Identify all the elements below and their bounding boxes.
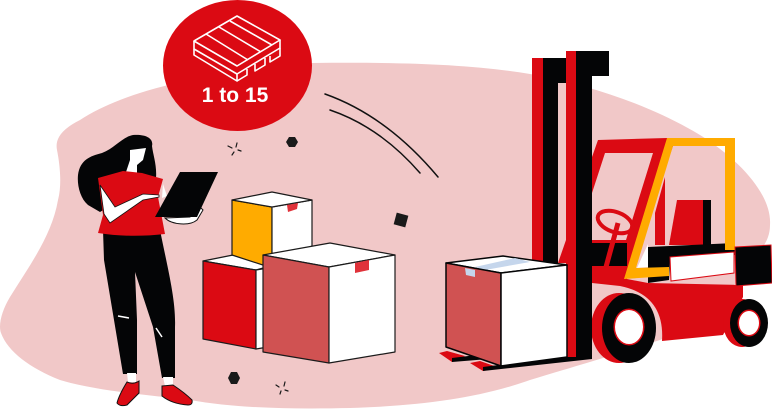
shoes	[117, 381, 192, 406]
seat	[669, 200, 711, 245]
decorative shapes	[228, 137, 408, 394]
body	[592, 266, 743, 341]
arm	[100, 185, 159, 223]
shirt	[98, 171, 165, 236]
hair	[78, 135, 156, 212]
box on forks	[446, 256, 567, 366]
yellow box	[232, 192, 312, 268]
icon: pallet	[194, 16, 280, 81]
floor deck	[592, 243, 627, 267]
red box	[203, 255, 285, 349]
rear wheel	[723, 299, 768, 347]
steering wheel	[595, 206, 635, 267]
other arm	[165, 205, 203, 224]
yellow roll cage	[624, 138, 735, 279]
trousers	[103, 230, 175, 378]
rear mast	[532, 58, 566, 263]
counterweight	[735, 245, 772, 286]
black chassis	[648, 243, 735, 283]
cab frame	[592, 138, 673, 283]
large box	[263, 243, 395, 363]
face and neck	[126, 148, 146, 173]
trouser highlights	[118, 316, 162, 337]
red badge	[163, 0, 312, 131]
white cab panel	[637, 244, 648, 268]
badge label: 1 to 15	[202, 84, 269, 107]
tablet	[155, 172, 218, 217]
person with tablet	[78, 135, 218, 406]
forks	[439, 351, 592, 371]
motion arcs	[325, 94, 438, 177]
white side panel	[670, 252, 734, 281]
cab rear	[655, 177, 665, 245]
socks	[127, 373, 173, 386]
front wheel	[591, 293, 656, 363]
box stack	[203, 192, 395, 363]
forklift	[439, 51, 772, 371]
front mast	[566, 51, 609, 357]
